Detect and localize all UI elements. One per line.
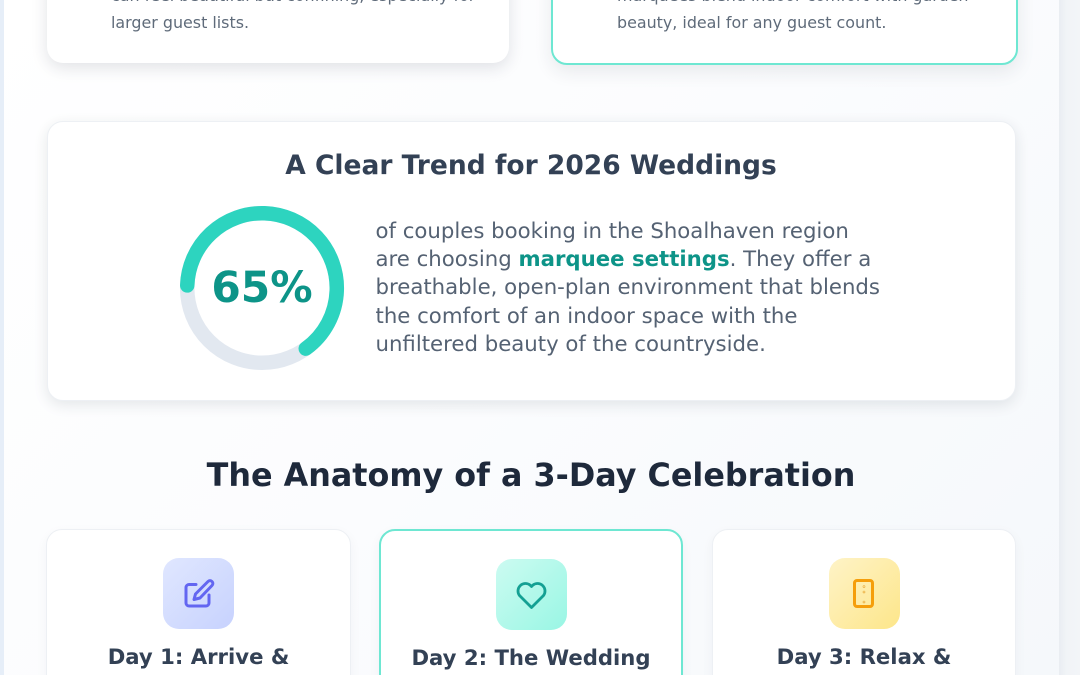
- text: trend description: breathable, open-plan environment that blends: [376, 275, 880, 300]
- text: trend description: of couples booking in the Shoalhaven region: [376, 218, 849, 244]
- donut chart: 65 percent: [180, 206, 344, 370]
- panel: marquee card: [551, 0, 1018, 65]
- heading: anatomy section: The Anatomy of a 3-Day Celebration: [207, 457, 855, 494]
- donut chart: 65 percent: 65%: [211, 263, 313, 312]
- heading: day 2 title: Day 2: The Wedding: [411, 645, 651, 670]
- text: trend description: unfiltered beauty of the countryside.: [376, 332, 766, 357]
- text: trend description: are choosing marquee settings. They offer a: [376, 247, 871, 272]
- panel: day 1: [46, 529, 351, 675]
- panel: day 2: [379, 529, 683, 675]
- icon: heart: [496, 559, 567, 630]
- text: trend description: [376, 218, 880, 357]
- text: marquee description: [617, 0, 968, 32]
- panel: traditional venue card: [47, 0, 509, 63]
- text: traditional venue description: [111, 0, 475, 32]
- text: trend description: the comfort of an indoor space with the: [376, 304, 797, 329]
- icon: door: [829, 558, 900, 629]
- icon: edit pencil: [163, 558, 234, 629]
- panel: day 3: [712, 529, 1016, 675]
- panel: 2026 trend: [46, 121, 1016, 401]
- heading: day 1 title: Day 1: Arrive &: [108, 644, 289, 669]
- heading: trend title: A Clear Trend for 2026 Weddings: [285, 150, 777, 180]
- text: marquee description: beauty, ideal for any guest count.: [617, 13, 886, 32]
- heading: day 3 title: Day 3: Relax &: [777, 644, 951, 669]
- text: traditional venue description: larger guest lists.: [111, 13, 249, 32]
